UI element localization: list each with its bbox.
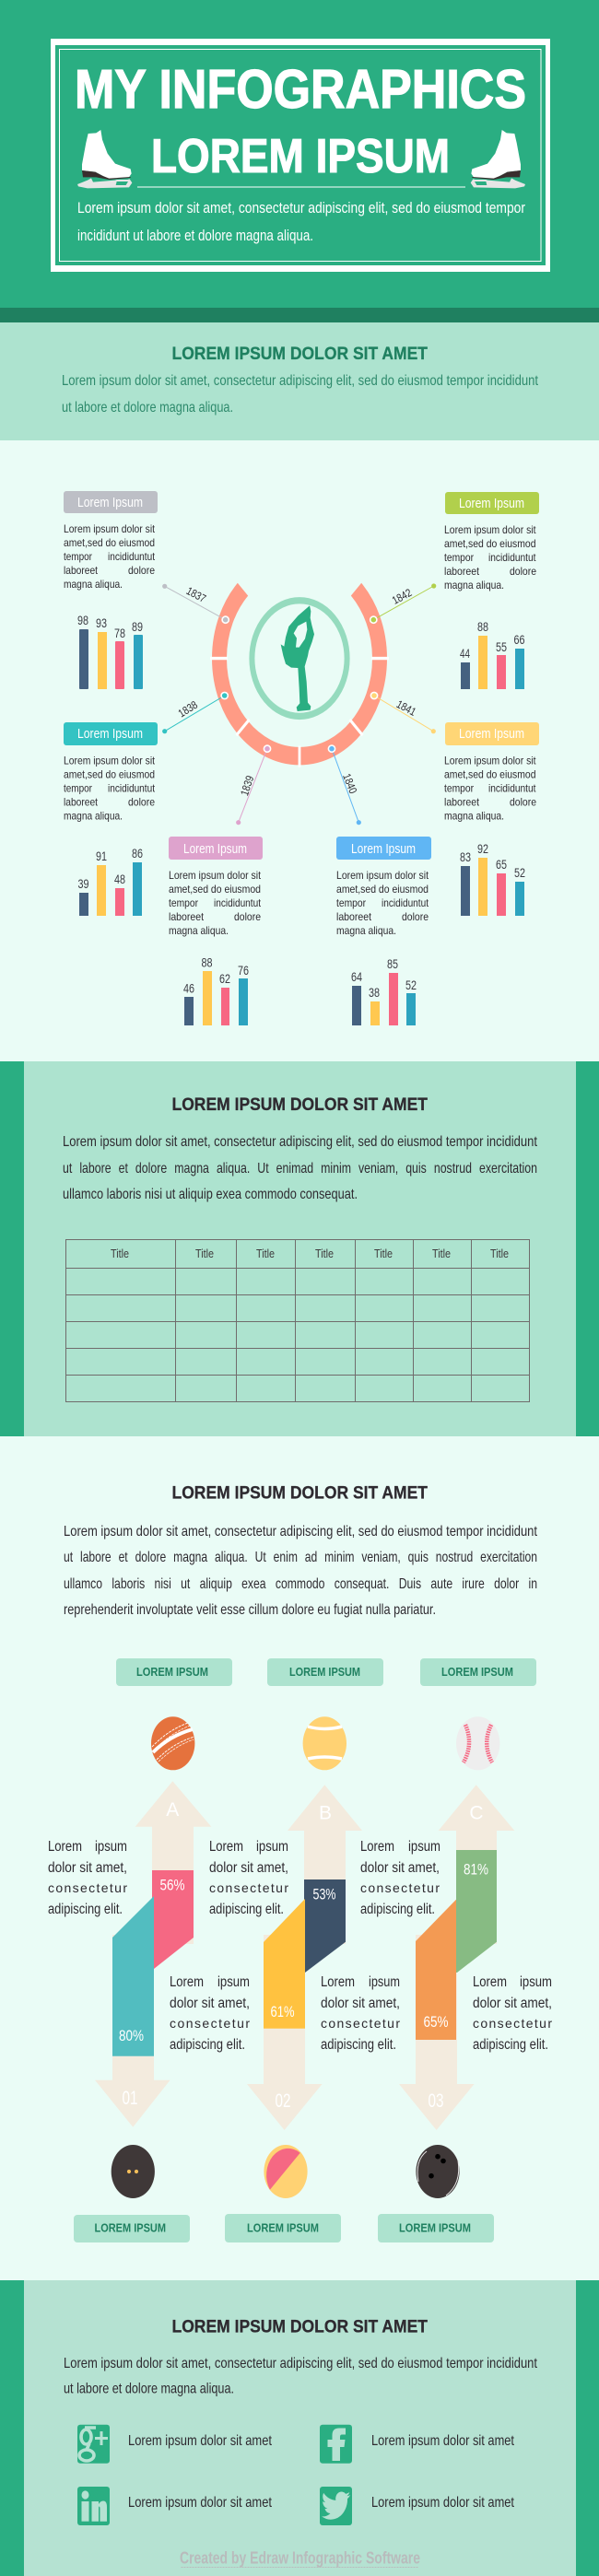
footer credit: Created by Edraw Infographic Software [180,2548,420,2567]
text: laboreet [444,565,480,578]
bar chart: 38 [369,985,380,1000]
arrow labels: 02 [275,2090,291,2112]
text: tempor [64,550,92,563]
text block: 01 right: adipiscing elit. [170,2037,245,2053]
card: yellow [444,722,539,916]
heading: arrows section: LOREM IPSUM DOLOR SIT AMET [171,1483,428,1504]
text block: B right [360,1839,440,1917]
subtitle underline [137,186,465,188]
text: Lorem ipsum dolor sit [336,869,429,882]
bar chart [183,954,249,1025]
text: dolore [402,910,429,923]
text: amet,sed do eiusmod [169,883,261,896]
title: MY INFOGRAPHICS [75,59,526,120]
text block: B right: Lorem [360,1839,394,1855]
label [64,722,158,745]
text block: A right: Lorem [209,1839,243,1855]
connector: 1842: 1842 [390,586,414,607]
arrow group A / 01 [95,1781,211,2127]
intro text [62,373,538,416]
bottom labels [74,2214,494,2242]
label: Lorem Ipsum [183,841,247,857]
text block: B right: consectetur [360,1880,440,1895]
icon: google plus [77,2425,110,2464]
pink fill [152,1870,194,1969]
icon: figure skater [281,605,314,711]
text: tempor [444,551,474,564]
arrow labels: 61% [271,2003,295,2020]
card: lime [444,492,539,689]
header text [77,200,525,244]
text: magna aliqua. [64,578,123,591]
table intro text [63,1134,537,1202]
arrow labels: C [469,1802,484,1824]
text [64,522,156,591]
panel: timeline ring [162,583,436,825]
text block: 03 right: consectetur [473,2016,552,2031]
bar chart: 65 [496,857,507,872]
bar chart: 62 [219,971,230,986]
text: tempor [444,781,474,794]
bar chart: 48 [114,872,125,886]
arrow labels [424,1802,488,2112]
subtitle: LOREM IPSUM [151,130,450,183]
bar chart: 88 [477,619,488,634]
panel: table section [0,1061,599,1436]
navy fill [304,1879,346,1973]
bar chart: 78 [114,626,125,640]
contact line 4: Lorem ipsum dolor sit amet [371,2495,514,2511]
text block: 03 right: adipiscing elit. [473,2037,548,2053]
bar chart: 89 [132,619,143,634]
text: Lorem ipsum dolor sit [64,522,156,535]
table: Title [256,1247,275,1260]
icon: left ice skate [77,130,132,188]
teal fill [112,1896,154,2056]
connector: 1841: 1841 [394,697,418,719]
text: Lorem ipsum dolor sit [444,523,536,536]
connector: 1837 [162,584,229,623]
text: tempor [169,896,198,909]
orange fill [416,1900,456,2040]
arrow group B / 02 [247,1785,362,2130]
text block: A right: consectetur [209,1880,288,1895]
text: magna aliqua. [444,579,504,591]
text block: B right: ipsum [408,1839,440,1855]
card: teal [64,722,158,916]
text: incididuntut [382,896,429,909]
arrow labels [119,1799,184,2109]
icon: twitter [320,2487,352,2525]
top labels: LOREM IPSUM [136,1665,208,1679]
text block: 02 right: Lorem [321,1974,355,1990]
bar chart: 64 [351,969,362,984]
icon: cricket ball [151,1716,194,1770]
title frame [51,39,550,272]
text [169,869,262,937]
text [444,754,536,822]
arrow up A [135,1781,211,1944]
arrow labels: 65% [424,2013,448,2031]
text: amet,sed do eiusmod [336,883,429,896]
text: dolore [510,796,536,809]
text: magna aliqua. [336,924,396,937]
bar chart [77,613,143,689]
arrow labels [271,1802,335,2112]
table [66,1240,529,1402]
text: dolore [510,565,536,578]
text block: A left: dolor sit amet, [48,1860,127,1876]
text block: A right: dolor sit amet, [209,1860,288,1876]
text block: A right: adipiscing elit. [209,1902,284,1917]
top labels: LOREM IPSUM [441,1665,513,1679]
connector: 1839: 1839 [238,774,256,797]
text [444,523,536,591]
text block: B right: adipiscing elit. [360,1902,435,1917]
text: laboreet [169,910,205,923]
arrow labels: B [319,1802,332,1824]
connector: 1842 [370,583,436,623]
bottom labels: LOREM IPSUM [399,2220,471,2235]
connector: 1838: 1838 [176,698,200,720]
green fill [456,1850,497,1973]
icon: squash ball [112,2145,155,2198]
text block: 02 right [321,1974,400,2053]
icon: facebook [320,2425,352,2464]
text: arrows section intro [64,1524,537,1618]
text: laboreet [444,796,480,809]
text block: A left: adipiscing elit. [48,1902,123,1917]
table: Title [432,1247,451,1260]
text: dolore [128,796,155,809]
bar chart: 91 [96,849,107,863]
text: magna aliqua. [169,924,229,937]
text: laboreet [64,564,99,577]
text block: A left: consectetur [48,1880,127,1895]
text: amet,sed do eiusmod [444,537,536,550]
text block: 03 right: ipsum [520,1974,552,1990]
bar chart: 44 [460,646,470,661]
bar chart: 46 [183,980,194,995]
text: amet,sed do eiusmod [64,536,155,549]
table: Title [374,1247,393,1260]
label [336,837,431,860]
bar chart: 52 [405,978,417,992]
bar chart: 88 [201,954,213,969]
ring chart [210,590,389,767]
icon: baseball [456,1716,499,1770]
text: Lorem ipsum dolor sit [64,754,156,767]
contact heading: LOREM IPSUM DOLOR SIT AMET [171,2316,428,2336]
text: incididuntut [108,781,156,794]
text: incididuntut [108,550,156,563]
text block: 02 right: adipiscing elit. [321,2037,396,2053]
top labels: LOREM IPSUM [289,1665,360,1679]
bar chart: 93 [96,615,107,630]
arrow labels: 53% [313,1885,335,1903]
text: Lorem ipsum dolor sit [169,869,262,882]
table heading: LOREM IPSUM DOLOR SIT AMET [171,1095,428,1115]
arrow down 01 [95,1935,170,2127]
icon: bowling ball [416,2145,460,2198]
text block: 01 right: consectetur [170,2016,250,2031]
text: magna aliqua. [444,809,504,822]
connector: 1841 [370,692,436,733]
text block: 01 right: ipsum [217,1974,250,1990]
header text: incididunt ut labore et dolore magna aliqua. [77,228,313,244]
table: Title [315,1247,334,1260]
text: tempor [336,896,366,909]
arrow down 03 [399,1935,475,2130]
connector: 1840 [328,745,361,825]
text: dolore [128,564,155,577]
bar chart: 76 [238,963,249,978]
bottom labels: LOREM IPSUM [94,2220,166,2235]
text: amet,sed do eiusmod [444,768,536,781]
panel: contact section [0,2280,599,2576]
bar chart [460,841,525,916]
bottom labels: LOREM IPSUM [247,2220,319,2235]
bar chart: 39 [77,876,89,891]
text [336,869,429,937]
text: magna aliqua. [64,809,123,822]
bar chart: 85 [387,956,398,971]
connector: 1839 [236,745,271,825]
icon: tennis ball [303,1716,346,1770]
label [64,491,158,513]
label: Lorem Ipsum [351,841,416,857]
bar chart [460,619,525,689]
card: grey [64,491,158,689]
table: Title [111,1247,129,1260]
label [445,492,539,514]
arrow up B [288,1785,362,1944]
text: incididuntut [488,781,536,794]
arrow labels: 56% [160,1876,184,1894]
intro heading: LOREM IPSUM DOLOR SIT AMET [171,344,428,364]
text block: 03 right: Lorem [473,1974,507,1990]
icon: right ice skate [471,130,525,188]
bar chart: 98 [77,613,88,627]
label: Lorem Ipsum [77,726,143,742]
text block: 01 right: Lorem [170,1974,204,1990]
table: Title [195,1247,214,1260]
label: Lorem Ipsum [77,495,143,510]
arrow up C [439,1785,514,1944]
text block: B right: dolor sit amet, [360,1860,440,1876]
text block: A left: Lorem [48,1839,82,1855]
bar chart: 86 [132,846,143,861]
contact line 2: Lorem ipsum dolor sit amet [371,2433,514,2449]
text [64,754,156,822]
table: Title [490,1247,509,1260]
card: blue [336,837,431,1025]
text: Lorem ipsum dolor sit [444,754,536,767]
text block: 02 right: consectetur [321,2016,400,2031]
icon: two-tone ball [264,2145,308,2198]
connector: 1840: 1840 [340,772,359,796]
bar chart [351,956,417,1025]
text: incididuntut [488,551,536,564]
text block: A left: ipsum [95,1839,127,1855]
label [169,837,263,860]
arrow labels: 80% [119,2027,144,2044]
arrow labels: 01 [122,2088,138,2109]
contact text [64,2356,537,2397]
panel: intro [0,322,599,440]
header text: Lorem ipsum dolor sit amet, consectetur adipiscing elit, sed do eiusmod tempor [77,200,525,217]
bar chart: 83 [460,849,471,864]
arrow labels: 81% [464,1861,488,1878]
text block: A right [209,1839,288,1917]
label [445,722,539,745]
card: pink [169,837,263,1025]
connector: 1837: 1837 [184,584,208,605]
text block: A left [48,1839,127,1917]
bar chart: 66 [514,632,525,647]
text: dolore [234,910,261,923]
text block: 01 right [170,1974,250,2053]
arrow labels: A [166,1799,179,1821]
arrow down 02 [247,1935,323,2130]
connector: 1838 [162,692,228,733]
text block: 03 right: dolor sit amet, [473,1996,552,2011]
bar chart: 52 [514,865,525,880]
yellow fill [264,1899,305,2029]
arrow group C / 03 [399,1785,514,2130]
text: incididuntut [214,896,262,909]
arrow labels: 03 [428,2090,444,2112]
text block: 02 right: ipsum [369,1974,400,1990]
label: Lorem Ipsum [459,726,524,742]
bar chart [77,846,143,916]
text: laboreet [64,796,99,809]
text block: A right: ipsum [256,1839,288,1855]
text: amet,sed do eiusmod [64,768,155,781]
icon: linkedin [77,2487,110,2525]
text: laboreet [336,910,372,923]
contact line 3: Lorem ipsum dolor sit amet [128,2495,272,2511]
bar chart: 55 [496,639,507,654]
top labels [116,1658,536,1686]
text block: 02 right: dolor sit amet, [321,1996,400,2011]
text block: 01 right: dolor sit amet, [170,1996,250,2011]
contact text: ut labore et dolore magna aliqua. [64,2381,234,2397]
intro text: ut labore et dolore magna aliqua. [62,400,233,416]
bar chart: 92 [477,841,488,856]
panel: header [0,0,599,322]
text block: 03 right [473,1974,552,2053]
text: tempor [64,781,92,794]
table intro text: ullamco laboris nisi ut aliquip exea commodo consequat. [63,1187,358,1202]
text: arrows section intro: reprehenderit involuptate velit esse cillum dolore eu fugiat nulla pariatur. [64,1602,436,1618]
contact line 1: Lorem ipsum dolor sit amet [128,2433,272,2449]
label: Lorem Ipsum [459,496,524,511]
